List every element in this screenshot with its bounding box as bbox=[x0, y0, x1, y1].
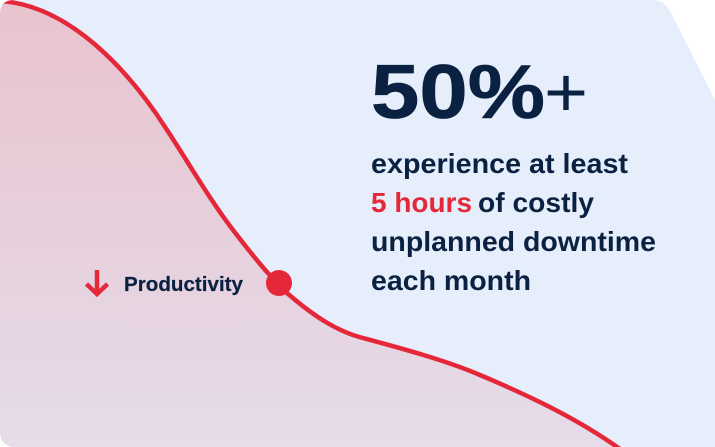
chart label: Productivity: Productivity bbox=[124, 273, 244, 296]
chart marker bbox=[266, 270, 292, 296]
headline stat: + bbox=[544, 53, 588, 131]
description text: each month bbox=[371, 265, 531, 296]
description text: of costly bbox=[478, 187, 594, 218]
headline stat: 50% bbox=[371, 50, 545, 135]
description text: unplanned downtime bbox=[371, 226, 656, 257]
description text: 5 hours bbox=[371, 187, 472, 218]
description text bbox=[371, 148, 656, 296]
description text: experience at least bbox=[371, 148, 628, 179]
icon: down arrow bbox=[86, 270, 108, 294]
